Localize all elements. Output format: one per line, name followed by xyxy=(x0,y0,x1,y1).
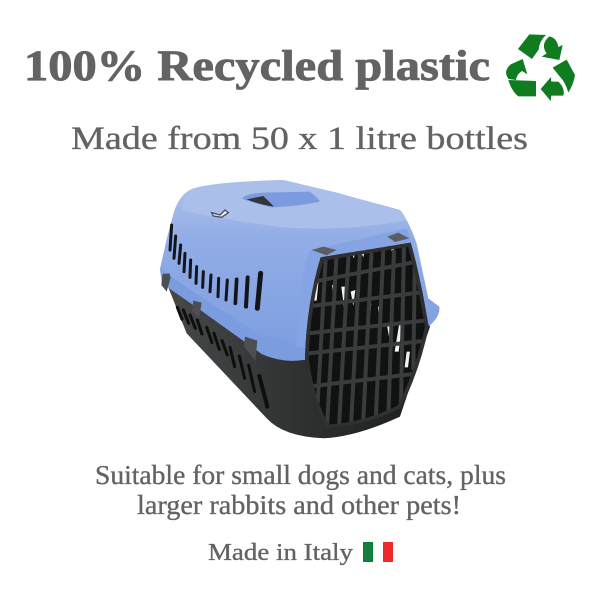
side vents on base xyxy=(177,307,267,407)
side latch xyxy=(212,210,228,217)
door grille xyxy=(303,247,430,433)
side clips xyxy=(161,273,257,361)
description line 1: Suitable for small dogs and cats, plus xyxy=(95,460,506,490)
description line 2: larger rabbits and other pets! xyxy=(137,490,461,520)
icon: italian flag xyxy=(363,542,393,562)
made in italy label: Made in Italy xyxy=(208,540,353,566)
view through door xyxy=(313,245,410,367)
door hinges xyxy=(312,233,409,255)
handle recess xyxy=(242,192,320,207)
lid vents xyxy=(170,225,261,308)
lid top highlight xyxy=(182,180,407,229)
pet carrier illustration xyxy=(160,180,439,438)
door xyxy=(305,242,429,424)
subtitle: Made from 50 x 1 litre bottles xyxy=(71,121,528,157)
door frame xyxy=(305,243,429,428)
icon: recycling symbol xyxy=(506,34,575,101)
title: 100% Recycled plastic xyxy=(24,43,490,90)
handle xyxy=(247,196,274,207)
door backing xyxy=(305,242,428,424)
carrier dark base xyxy=(167,283,430,438)
door surround crease xyxy=(297,228,412,348)
lid rim xyxy=(160,269,303,361)
carrier blue lid xyxy=(160,180,439,361)
